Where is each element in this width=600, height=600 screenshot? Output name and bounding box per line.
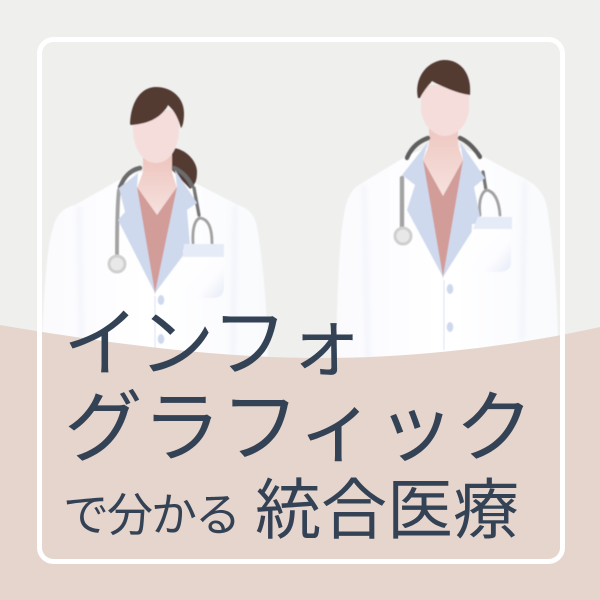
neck (137, 155, 177, 216)
hair (417, 60, 470, 98)
coat (336, 148, 558, 365)
head (133, 110, 179, 163)
lapels (402, 142, 443, 277)
doctor: man (336, 60, 558, 365)
head (421, 85, 469, 136)
title line 1: インフォ (63, 302, 363, 387)
title line 2: グラフィック (64, 384, 533, 472)
pocket (183, 250, 224, 298)
coat shading (79, 206, 235, 355)
hair (130, 87, 184, 128)
pocket (470, 224, 511, 272)
neck (423, 120, 463, 196)
buttons (158, 295, 164, 305)
scrubs (423, 160, 463, 278)
subtitle: で分かる: で分かる (63, 489, 239, 541)
coat (42, 172, 268, 360)
coat shading (364, 182, 525, 360)
buttons (447, 284, 453, 294)
doctor: woman (42, 87, 268, 360)
stethoscope (109, 168, 212, 272)
stethoscope (395, 138, 500, 244)
lapels (118, 173, 155, 293)
ponytail (172, 148, 197, 189)
subtitle: 統合医療: 統合医療 (255, 473, 519, 547)
beige curved panel (0, 325, 600, 600)
scrubs (137, 187, 177, 294)
white rounded frame (40, 40, 562, 562)
